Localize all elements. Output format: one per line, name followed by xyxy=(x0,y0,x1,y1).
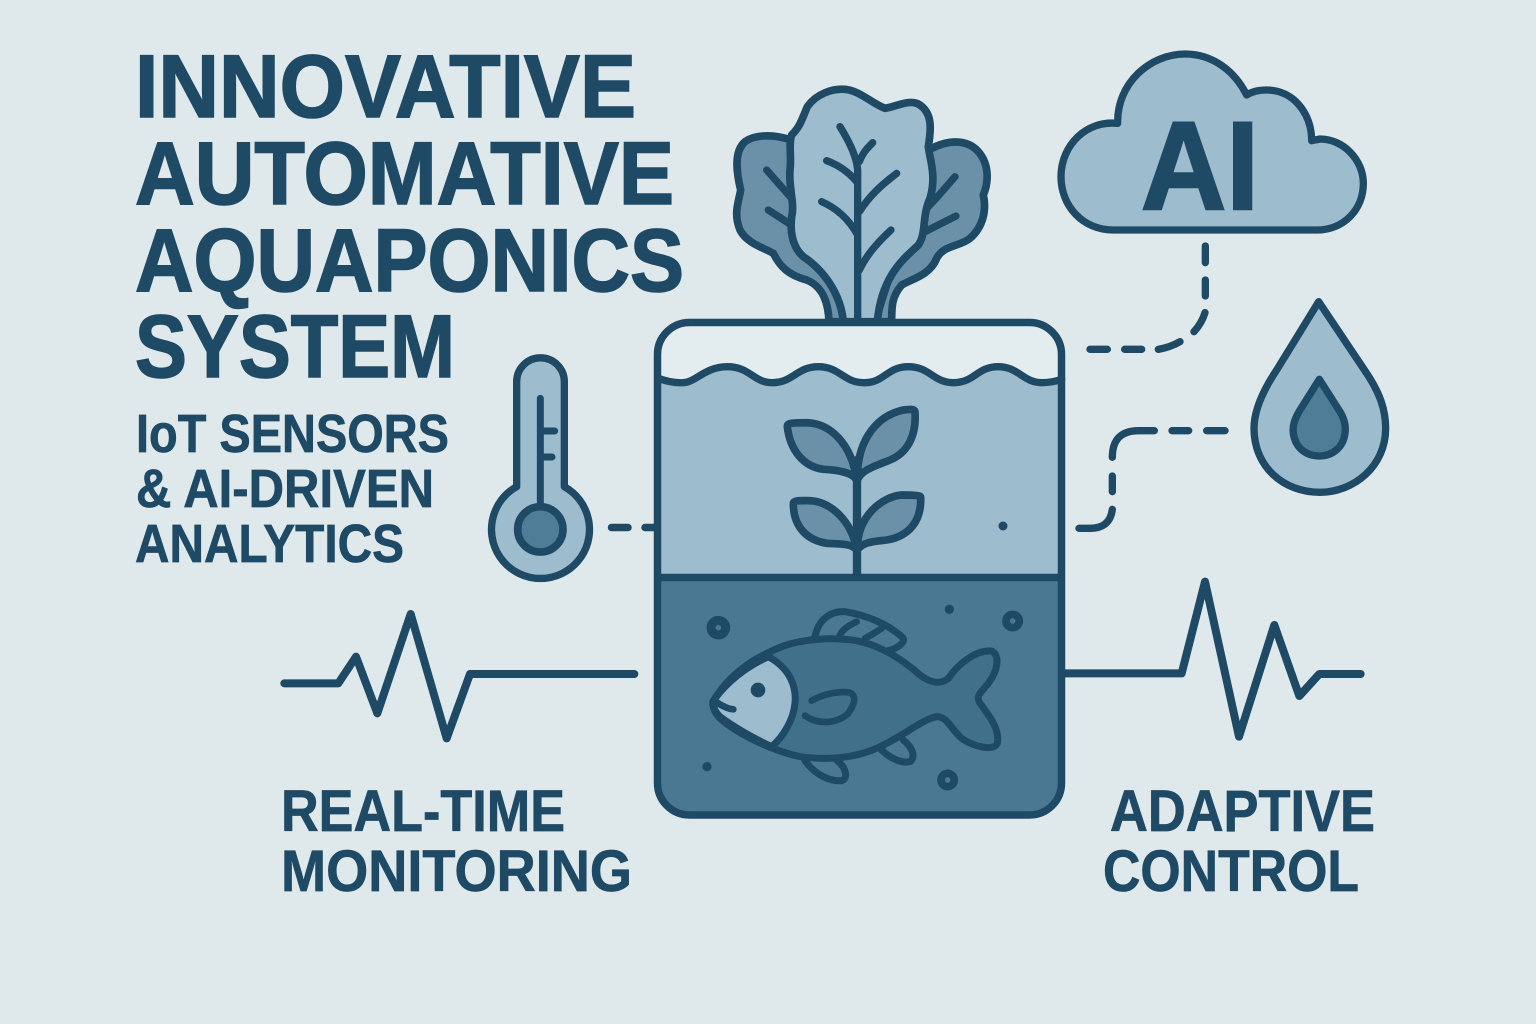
fish head xyxy=(714,657,795,747)
icon: seedling in water xyxy=(787,409,921,577)
fish body xyxy=(713,639,998,758)
title: INNOVATIVE xyxy=(135,36,636,136)
lower fins xyxy=(805,740,913,781)
label: real-time monitoring xyxy=(281,779,632,904)
tank water layer xyxy=(658,367,1062,578)
chart: real-time pulse line xyxy=(284,614,634,738)
water dot xyxy=(998,522,1008,530)
arrow: thermometer to tank xyxy=(612,524,655,531)
left lettuce leaf xyxy=(737,136,847,322)
label: adaptive control: CONTROL xyxy=(1103,839,1359,904)
title: AUTOMATIVE xyxy=(135,123,674,223)
label: real-time monitoring: REAL-TIME xyxy=(281,779,565,844)
label: real-time monitoring: MONITORING xyxy=(281,839,632,904)
icon: AI cloud: AI xyxy=(1141,97,1259,236)
chart: adaptive control pulse line xyxy=(1063,582,1361,737)
label: adaptive control xyxy=(1103,779,1375,904)
icon: AI cloud xyxy=(1061,54,1363,236)
title xyxy=(135,36,684,396)
icon: thermometer xyxy=(491,358,589,578)
subtitle: & AI-DRIVEN xyxy=(136,459,434,519)
icon: fish with bubbles xyxy=(702,605,1019,787)
arrow: cloud to tank xyxy=(1090,246,1205,349)
title: AQUAPONICS xyxy=(135,210,684,310)
tank outline xyxy=(657,322,1062,815)
label: adaptive control: ADAPTIVE xyxy=(1110,779,1375,844)
right lettuce leaf xyxy=(875,142,987,322)
arrow: droplet to tank xyxy=(1079,431,1225,528)
icon: lettuce plant xyxy=(737,89,987,322)
tank fish layer xyxy=(658,578,1062,815)
icon: water tank xyxy=(657,322,1062,815)
fish details xyxy=(717,622,882,722)
icon: water droplet xyxy=(1254,302,1386,492)
fish eye xyxy=(751,683,765,697)
dorsal fin xyxy=(815,612,904,651)
tank divider xyxy=(658,574,1062,581)
subtitle: ANALYTICS xyxy=(135,514,404,574)
bubbles xyxy=(702,605,1019,787)
tank air space xyxy=(657,322,1062,420)
subtitle: IoT SENSORS xyxy=(136,404,449,464)
title: SYSTEM xyxy=(135,296,455,396)
water surface wave xyxy=(658,367,1062,383)
subtitle xyxy=(135,404,449,574)
central lettuce leaf xyxy=(790,89,933,322)
